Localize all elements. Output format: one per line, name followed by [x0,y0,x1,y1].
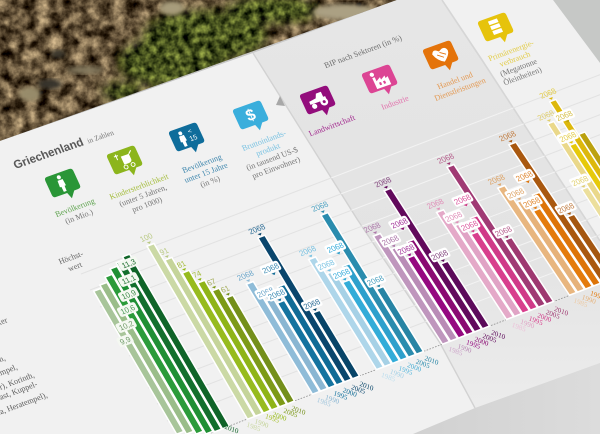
year labels: agriculture: 1985 [448,345,464,358]
value labels: GDP: 2068 [297,244,318,258]
value labels: child mortality: 91 [158,246,170,257]
year labels: industry [512,306,568,332]
value labels: trade: 2068 [521,195,543,209]
value labels: child mortality: 81 [175,259,188,270]
text: GDP label: Bruttoinlands- [240,128,288,153]
value labels: primary energy [538,88,591,188]
icon: primary energy barrel [477,12,517,48]
value labels: primary energy: 2068 [554,109,575,123]
value labels: under 15: 2068 [302,297,323,311]
text: trade label [429,67,487,103]
icon: child mortality [106,145,146,181]
value labels: industry [426,154,514,239]
year labels: under 15: 2005 [350,383,366,396]
heading: Griechenland in Zahlen [11,125,116,172]
icon: GDP dollar: $ [243,106,259,125]
year labels: child mortality: 2010 [291,404,307,417]
value labels: population: 9,9 [118,335,132,347]
chart: population under 15 [237,224,360,395]
text: GDP label: produkt [254,141,282,158]
text: GDP label [237,127,303,181]
text: primary energy label: Öleinheiten) [502,65,543,87]
value labels: GDP: 2068 [316,258,337,272]
value labels: population: 11,3 [120,257,138,270]
heading: Griechenland in Zahlen: in Zahlen [86,128,116,145]
chart: trade and services [488,131,600,296]
year labels: industry: 2010 [553,305,569,318]
icon: GDP dollar [232,100,272,136]
value labels: population: 10,6 [119,303,137,316]
value labels: trade: 2068 [555,201,577,215]
text: agriculture label: Landwirtschaft [307,113,357,138]
panel: middle grey page [253,0,600,408]
text: primary energy label: (Megatonne [499,57,539,79]
value labels: GDP: 2068 [325,241,346,255]
photo: Greek hillside [0,0,400,145]
bars: primary energy [547,99,600,218]
chart: population [83,254,230,434]
value labels: industry: 2068 [493,224,514,239]
year labels: GDP: 1995 [398,364,414,377]
value labels: agriculture: 2068 [389,216,410,230]
panel: left white page [0,53,475,434]
year labels: GDP: 2005 [415,358,431,370]
year labels: under 15: 1990 [324,393,340,406]
year labels: agriculture: 1995 [465,338,481,351]
value labels: population: 10,2 [117,319,135,332]
value labels: industry: 2068 [443,210,465,224]
year labels: agriculture: 2010 [490,329,506,341]
value labels: under 15: 2068 [247,222,268,236]
text: under 15 label: unter 15 Jahre [183,161,229,185]
year labels: GDP: 2000 [406,361,422,374]
bars: under 15 [246,234,360,395]
year labels: industry: 2000 [537,311,552,324]
value labels: industry: 2068 [459,219,481,233]
chart: agriculture [364,177,490,345]
text: Hoechstwert axis note: Höchst- [57,249,85,266]
value labels: industry: 2068 [452,193,473,207]
year labels: GDP: 1985 [380,371,396,384]
chart: industry [426,154,554,320]
year labels: GDP: 2010 [424,354,440,367]
value labels: GDP: 2068 [310,199,331,214]
year labels: agriculture: 1990 [457,342,473,355]
value labels: population: 11,1 [120,273,138,286]
bars: agriculture [372,187,490,345]
text: under 15 label [179,152,234,194]
icon: population under 15: 15 [189,134,199,143]
year labels: under 15: 2000 [342,386,358,399]
value labels: agriculture [364,177,450,262]
year labels: child mortality: 1995 [264,412,280,425]
value labels: under 15: 2068 [235,268,256,283]
bars: child mortality [147,228,294,419]
text: population label: Bevölkerung [54,196,96,219]
year labels: child mortality: 1990 [254,417,270,430]
year labels: under 15: 1995 [333,389,349,402]
panel: right white page [442,0,600,241]
value labels: under 15 [237,224,322,312]
year labels: agriculture [448,330,505,356]
chart: GDP [299,202,424,370]
value labels: industry: 2068 [435,151,457,166]
year labels: agriculture: 2005 [482,332,498,345]
year labels: industry: 2005 [545,308,561,321]
text: GDP label: pro Einwohner) [251,155,302,181]
year labels: trade [574,291,600,307]
text: under 15 label: (in %) [199,174,222,189]
year labels: agriculture: 2000 [474,335,490,348]
bars: industry [436,164,554,320]
year labels: industry: 1985 [511,321,527,334]
value labels: primary energy: 2068 [538,86,559,100]
text: primary energy label: verbrauch [498,49,532,69]
value labels: trade [488,131,577,216]
year labels: industry: 1995 [528,315,544,327]
text: primary energy label [487,38,547,89]
text: cropped body copy at left edge [0,315,49,425]
year labels: child mortality [247,406,306,432]
icon: agriculture tractor [299,85,339,121]
value labels: child mortality: 74 [191,269,204,280]
text: primary energy label: Primärenergie- [487,38,536,63]
value labels: trade: 2068 [514,169,535,183]
year labels: child mortality: 2000 [272,410,288,423]
value labels: population: 10,9 [120,288,138,301]
year labels: industry: 1990 [520,318,535,331]
value labels: trade: 2068 [486,173,507,187]
value labels: child mortality [140,233,230,296]
value labels: population [115,256,140,348]
year labels: trade: 1985 [573,297,589,309]
text: under 15 label: Bevölkerung [181,152,223,175]
text: child mortality label [108,172,179,220]
year labels: GDP [382,356,438,382]
year labels: under 15: 2010 [359,380,375,393]
year labels: GDP: 1990 [389,368,405,381]
value labels: primary energy: 2068 [536,108,557,122]
text: trade label: Handel und [436,70,474,91]
text: GDP label: (in tausend US-$ [245,145,299,172]
year labels: under 15: 1985 [316,396,332,409]
text: trade label: Dienstleistungen [433,76,487,103]
chart: primary energy [538,88,600,218]
value labels: agriculture: 2068 [380,233,401,248]
text: population label [54,196,100,228]
bars: trade [496,142,600,296]
value labels: trade: 2068 [505,186,527,201]
text: child mortality label: (unter 5 Jahren, [118,183,168,209]
icon: population under 15 [168,122,208,158]
bars: GDP [308,212,424,370]
year labels: under 15 [317,382,374,406]
text: industry label: Industrie [380,93,411,112]
value labels: agriculture: 2068 [373,175,394,189]
value labels: agriculture: 2068 [396,242,417,256]
value labels: GDP: 2068 [331,267,352,281]
value labels: industry: 2068 [425,197,446,211]
value labels: child mortality: 100 [138,231,155,244]
text: child mortality label: pro 1000) [131,195,164,214]
value labels: GDP: 2068 [365,273,386,288]
value labels: agriculture: 2068 [362,220,383,235]
value labels: primary energy: 2068 [570,174,591,188]
icon: population [44,168,84,204]
text: population label: (in Mio.) [64,207,95,226]
icon: trade handshake [422,40,462,76]
icon: population under 15: < [187,128,193,136]
chart: child mortality [138,217,295,420]
value labels: child mortality: 67 [205,277,218,288]
value labels: under 15: 2068 [255,285,276,300]
value labels: under 15: 2068 [266,287,287,301]
value labels: trade: 2068 [497,129,518,143]
value labels: agriculture: 2068 [429,248,451,262]
heading: Griechenland in Zahlen: Griechenland [11,136,86,172]
text: Hoechstwert axis note [57,249,89,275]
value labels: GDP [299,202,386,288]
year labels: child mortality: 2005 [283,407,299,420]
icon: fold tab arrow [276,96,285,106]
year labels: trade: 1990 [581,293,597,306]
text: child mortality label: Kindersterblichkeit [108,172,170,202]
year labels: child mortality: 1985 [246,421,262,434]
value labels: primary energy: 2068 [558,130,579,144]
icon: industry factory [361,64,401,100]
value labels: under 15: 2068 [260,261,281,275]
text: Hoechstwert axis note: wert [66,260,84,273]
text: BIP sectors heading: BIP nach Sektoren (in %) [323,33,403,70]
value labels: child mortality: 61 [219,284,231,295]
